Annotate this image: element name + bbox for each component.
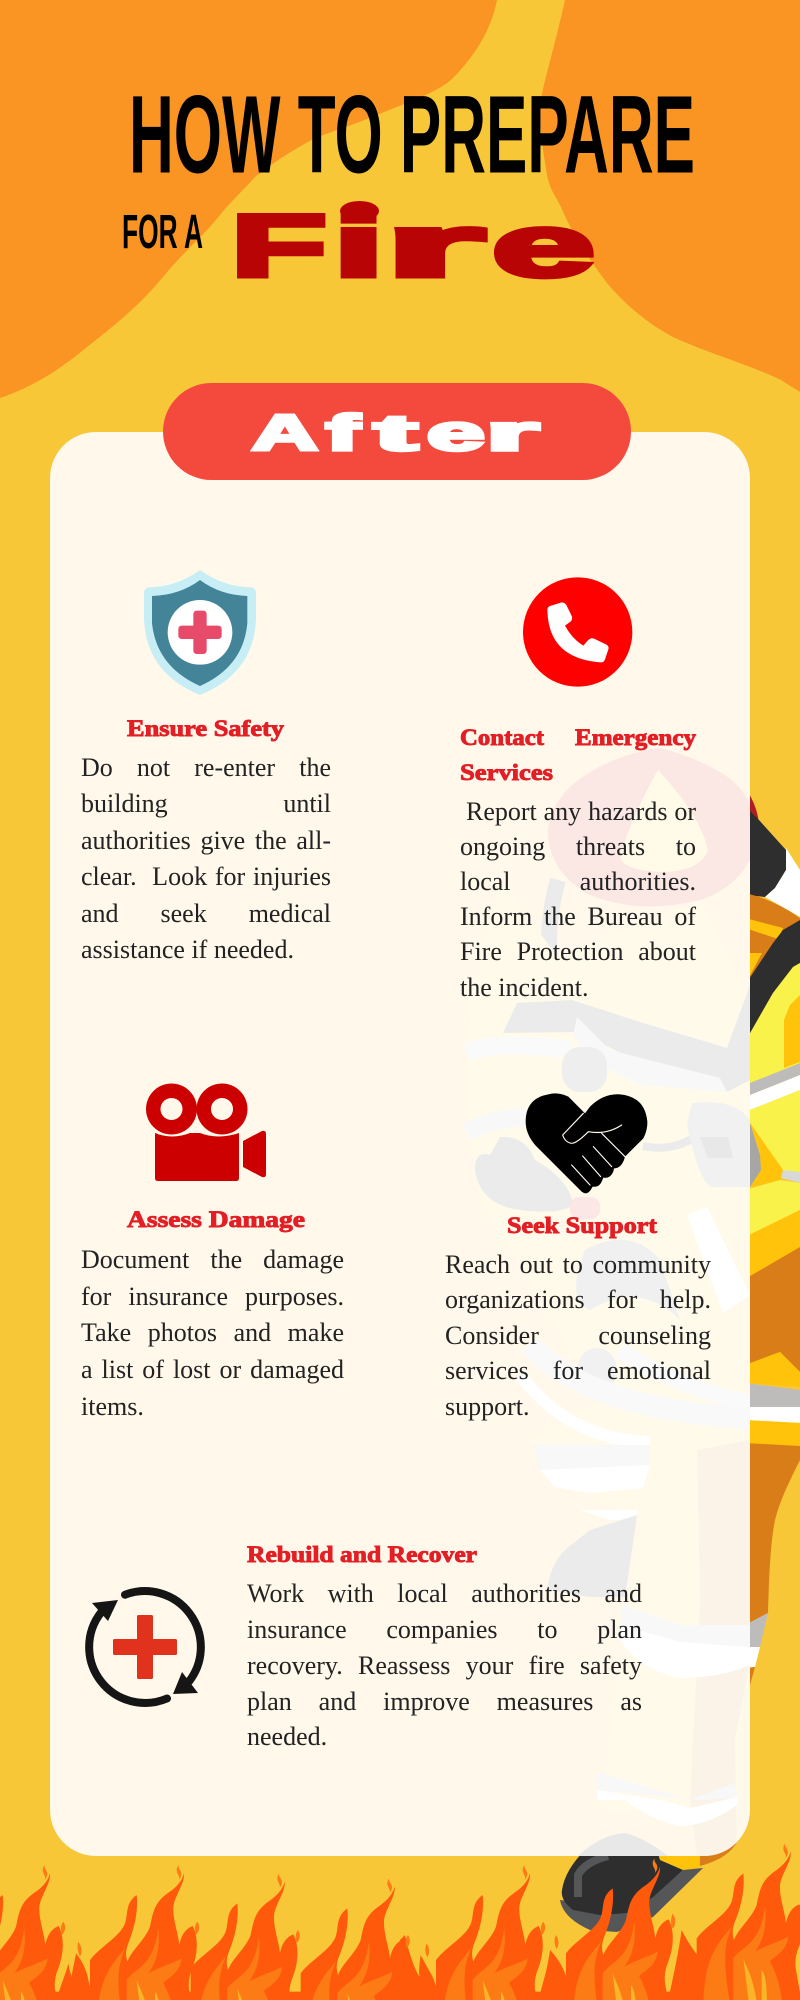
pill label: after: f xyxy=(326,405,359,461)
text block: rebuild and recover: recovery. Reassess your fire safety xyxy=(247,1651,642,1680)
faded firefighter figure through card xyxy=(467,748,756,1856)
text block: assess damage xyxy=(81,1245,344,1421)
text block: contact emergency services: Report any hazards or xyxy=(466,797,696,826)
icon: dot on the i of fire xyxy=(340,201,379,221)
text block: seek support: Reach out to community xyxy=(445,1250,711,1278)
text block: contact emergency services xyxy=(460,797,696,1002)
text block: contact emergency services: ongoing threats to xyxy=(460,832,696,861)
text block: seek support xyxy=(445,1250,711,1420)
icon: medical shield xyxy=(144,570,256,695)
heading: contact emergency services: Emergency xyxy=(575,725,697,750)
pill label: after: t xyxy=(374,405,417,461)
pill label: after xyxy=(250,405,542,461)
heading: contact emergency services xyxy=(460,725,697,785)
text block: contact emergency services: local authorities. xyxy=(460,867,696,896)
text block: rebuild and recover: plan and improve measures as xyxy=(247,1687,642,1716)
text block: contact emergency services: Fire Protection about xyxy=(460,937,696,966)
text block: ensure safety: and seek medical xyxy=(81,899,331,928)
text block: rebuild and recover: insurance companies to plan xyxy=(247,1615,642,1644)
text block: seek support: support. xyxy=(445,1392,530,1420)
flames along the bottom xyxy=(0,1843,800,2000)
text block: ensure safety: Do not re-enter the xyxy=(81,753,331,782)
heading: seek support: Seek Support xyxy=(507,1213,657,1238)
text block: ensure safety: authorities give the all- xyxy=(81,826,331,855)
background orange blobs xyxy=(0,0,800,398)
heading: contact emergency services: Services xyxy=(460,760,553,785)
text block: assess damage: Document the damage xyxy=(81,1245,344,1274)
subtitle: fire: F xyxy=(231,196,327,294)
text block: ensure safety xyxy=(81,753,331,964)
text block: ensure safety: assistance if needed. xyxy=(81,935,294,964)
text block: assess damage: items. xyxy=(81,1392,144,1421)
pill label: after: e xyxy=(426,405,484,461)
heading: ensure safety: Ensure Safety xyxy=(127,716,285,741)
heading: assess damage: Assess Damage xyxy=(127,1207,305,1232)
subtitle: fire xyxy=(231,196,595,294)
firefighter visible behind card xyxy=(560,787,800,1932)
subtitle: for a: FOR A xyxy=(122,206,203,259)
text block: assess damage: for insurance purposes. xyxy=(81,1282,344,1311)
subtitle: fire: i xyxy=(333,196,384,294)
text block: assess damage: a list of lost or damaged xyxy=(81,1355,344,1384)
icon: recovery cross xyxy=(89,1591,201,1703)
text block: ensure safety: building until xyxy=(81,789,331,818)
panel: content card xyxy=(50,432,750,1856)
icon: handshake heart xyxy=(526,1093,647,1193)
text block: rebuild and recover: needed. xyxy=(247,1722,327,1751)
text block: contact emergency services: the incident. xyxy=(460,973,589,1002)
section pill xyxy=(163,383,631,480)
subtitle: fire: r xyxy=(385,196,484,294)
text block: contact emergency services: Inform the Bureau of xyxy=(460,902,696,931)
text block: seek support: Consider counseling xyxy=(445,1320,711,1350)
text block: rebuild and recover xyxy=(247,1579,642,1751)
text block: assess damage: Take photos and make xyxy=(81,1318,344,1347)
subtitle: fire: e xyxy=(492,196,595,294)
heading: rebuild and recover: Rebuild and Recover xyxy=(247,1542,477,1567)
text block: seek support: organizations for help. xyxy=(445,1285,711,1314)
icon: phone xyxy=(523,577,632,687)
icon: film camera xyxy=(146,1084,266,1181)
pill label: after: r xyxy=(486,405,539,461)
pill label: after: A xyxy=(252,405,318,461)
text block: rebuild and recover: Work with local authorities and xyxy=(247,1579,642,1608)
heading: contact emergency services: Contact xyxy=(460,725,544,750)
text block: ensure safety: clear. Look for injuries xyxy=(81,862,331,891)
text block: seek support: services for emotional xyxy=(445,1356,711,1385)
